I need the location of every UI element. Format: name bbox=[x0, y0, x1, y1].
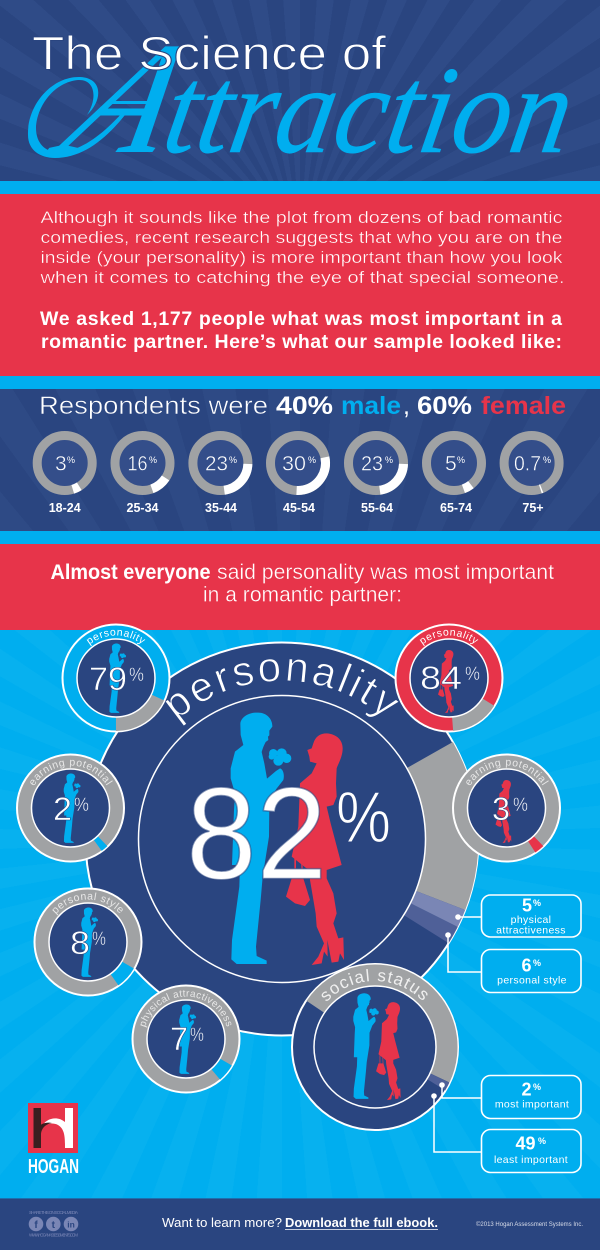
title line: The Science of: The Science of bbox=[32, 26, 387, 80]
intro bold text bbox=[40, 308, 562, 353]
respondents heading: Respondents were bbox=[39, 392, 268, 420]
footer background bbox=[0, 1198, 600, 1250]
male physical attractiveness 7% bbox=[132, 984, 240, 1094]
age ring: 25-34: 25-34 bbox=[127, 501, 159, 515]
finding panel background bbox=[0, 544, 600, 630]
intro text: comedies, recent research suggests that who you are on the bbox=[40, 228, 562, 247]
finding text: in a romantic partner: bbox=[203, 584, 402, 606]
age ring: 75+: 0.7 bbox=[514, 452, 541, 476]
female earning potential 3%: earning potential bbox=[466, 760, 549, 786]
female earning potential 3% bbox=[452, 754, 561, 862]
age ring: 45-54: 45-54 bbox=[283, 501, 315, 515]
intro bold text: romantic partner. Here’s what our sample looked like: bbox=[41, 331, 562, 353]
callout: physical attractiveness 5%: attractiveness bbox=[496, 924, 566, 936]
age ring: 75+ bbox=[496, 427, 567, 515]
social share block: t bbox=[52, 1220, 56, 1231]
male physical attractiveness 7%: % bbox=[190, 1025, 204, 1046]
male personal style 8% bbox=[34, 888, 142, 996]
respondents panel background bbox=[0, 389, 600, 531]
intro panel background bbox=[0, 194, 600, 376]
respondents heading: male bbox=[341, 392, 401, 420]
finding text: said personality was most important bbox=[217, 561, 554, 584]
intro text: when it comes to catching the eye of that special someone. bbox=[39, 268, 565, 287]
social status donut: social status bbox=[322, 969, 428, 1001]
callout: most important 2% bbox=[482, 1076, 581, 1118]
social share block: in bbox=[67, 1220, 75, 1230]
social share block: WWW.HOGANASSESSMENTS.COM bbox=[29, 1232, 78, 1238]
callout leaders bbox=[431, 914, 481, 1152]
female personality 84% bbox=[394, 624, 504, 732]
finding text: Almost everyone bbox=[50, 561, 210, 584]
respondents heading: 60% bbox=[417, 392, 472, 420]
callout: least important 49% bbox=[482, 1130, 581, 1172]
age ring: 65-74: 65-74 bbox=[440, 501, 472, 515]
age ring: 35-44: % bbox=[229, 455, 237, 465]
age ring: 25-34: 16 bbox=[128, 452, 148, 476]
male earning potential 2%: earning potential bbox=[30, 760, 113, 786]
callout: physical attractiveness 5%: 5 bbox=[522, 896, 532, 916]
age ring: 65-74: 5 bbox=[445, 452, 457, 476]
finding text bbox=[50, 561, 554, 606]
male physical attractiveness 7%: 7 bbox=[170, 1021, 188, 1057]
footer call to action bbox=[162, 1215, 438, 1230]
social share block: f bbox=[34, 1220, 38, 1231]
callout: personal style 6%: 6 bbox=[522, 956, 532, 976]
intro bold text: We asked 1,177 people what was most important in a bbox=[40, 308, 562, 330]
age ring: 25-34: % bbox=[149, 455, 157, 465]
callout: physical attractiveness 5%: physical bbox=[511, 914, 551, 926]
intro text: inside (your personality) is more important than how you look bbox=[40, 248, 563, 267]
age ring: 18-24: % bbox=[67, 455, 75, 465]
header background bbox=[0, 0, 600, 181]
callout: most important 2%: 2 bbox=[522, 1080, 532, 1100]
footer call to action: Download the full ebook. bbox=[285, 1215, 438, 1230]
age ring: 18-24: 3 bbox=[55, 452, 67, 476]
respondents heading: 40% bbox=[276, 392, 333, 420]
respondents heading bbox=[39, 392, 566, 420]
callout: most important 2%: most important bbox=[495, 1098, 569, 1110]
male personality 79%: personality bbox=[86, 630, 146, 646]
big number 82%: % bbox=[336, 778, 391, 858]
age ring: 25-34 bbox=[104, 425, 181, 515]
male earning potential 2%: 2 bbox=[53, 791, 72, 827]
age ring: 75+: % bbox=[543, 455, 551, 465]
female personality 84%: % bbox=[465, 664, 480, 685]
age ring: 45-54: % bbox=[308, 455, 316, 465]
callout: personal style 6%: % bbox=[533, 958, 541, 968]
female personality 84%: personality bbox=[420, 630, 478, 646]
age ring: 35-44: 23 bbox=[205, 452, 228, 476]
age ring: 55-64: 55-64 bbox=[361, 501, 393, 515]
couple silhouette bbox=[231, 713, 344, 965]
title script: Attraction: ttraction bbox=[155, 42, 584, 180]
callout: physical attractiveness 5% bbox=[482, 895, 581, 937]
sky background with rays bbox=[0, 630, 600, 1198]
Hogan logo: HOGAN bbox=[28, 1156, 79, 1178]
age ring: 65-74 bbox=[415, 424, 493, 515]
female earning potential 3%: % bbox=[513, 795, 528, 816]
age ring: 55-64: 23 bbox=[361, 452, 383, 476]
age ring: 55-64: % bbox=[385, 455, 393, 465]
age ring: 35-44 bbox=[192, 435, 249, 515]
age ring: 18-24: 18-24 bbox=[49, 501, 81, 515]
blue band bbox=[0, 376, 600, 389]
male personal style 8%: % bbox=[92, 929, 106, 950]
age ring: 45-54 bbox=[265, 430, 331, 515]
age ring: 75+: 75+ bbox=[522, 501, 544, 515]
intro text bbox=[39, 208, 565, 287]
title script: Attraction: A bbox=[27, 10, 229, 187]
male personality 79% bbox=[62, 624, 170, 732]
male earning potential 2%: % bbox=[74, 795, 89, 816]
callout: most important 2%: % bbox=[533, 1082, 541, 1092]
callout: least important 49%: 49 bbox=[516, 1134, 536, 1154]
intro text: Although it sounds like the plot from dozens of bad romantic bbox=[40, 208, 563, 227]
callout: least important 49%: least important bbox=[494, 1154, 568, 1166]
big number 82%: 82 bbox=[186, 760, 327, 906]
footer call to action: Want to learn more? bbox=[162, 1215, 282, 1230]
male personal style 8%: personal style bbox=[52, 892, 123, 916]
respondents heading: , bbox=[403, 392, 410, 420]
age ring: 18-24 bbox=[27, 425, 103, 515]
female earning potential 3%: 3 bbox=[492, 791, 510, 827]
social status donut bbox=[291, 963, 459, 1131]
copyright: ©2013 Hogan Assessment Systems Inc. bbox=[476, 1220, 583, 1228]
social share block bbox=[29, 1210, 78, 1238]
main ring label: personality bbox=[166, 659, 398, 726]
male personality 79%: 79 bbox=[89, 661, 127, 697]
male physical attractiveness 7%: physical attractiveness bbox=[140, 990, 232, 1028]
age ring: 65-74: % bbox=[457, 455, 465, 465]
main personality donut bbox=[86, 642, 479, 1036]
age ring: 35-44: 35-44 bbox=[205, 501, 237, 515]
respondents heading: female bbox=[481, 392, 566, 420]
age ring: 45-54: 30 bbox=[282, 452, 306, 476]
male personal style 8%: 8 bbox=[70, 925, 90, 961]
female personality 84%: 84 bbox=[420, 660, 462, 696]
callout: physical attractiveness 5%: % bbox=[533, 898, 541, 908]
Hogan logo bbox=[28, 1103, 79, 1178]
male personality 79%: % bbox=[129, 665, 144, 686]
male earning potential 2% bbox=[16, 754, 125, 862]
social share block: SHARE THIS ON SOCIAL MEDIA bbox=[29, 1210, 78, 1215]
blue band bbox=[0, 531, 600, 544]
callout: personal style 6% bbox=[482, 950, 581, 992]
blue band bbox=[0, 181, 600, 194]
callout: least important 49%: % bbox=[538, 1136, 546, 1146]
callout: personal style 6%: personal style bbox=[497, 974, 567, 986]
age ring: 55-64 bbox=[348, 435, 404, 515]
title script: Attraction bbox=[27, 10, 584, 187]
